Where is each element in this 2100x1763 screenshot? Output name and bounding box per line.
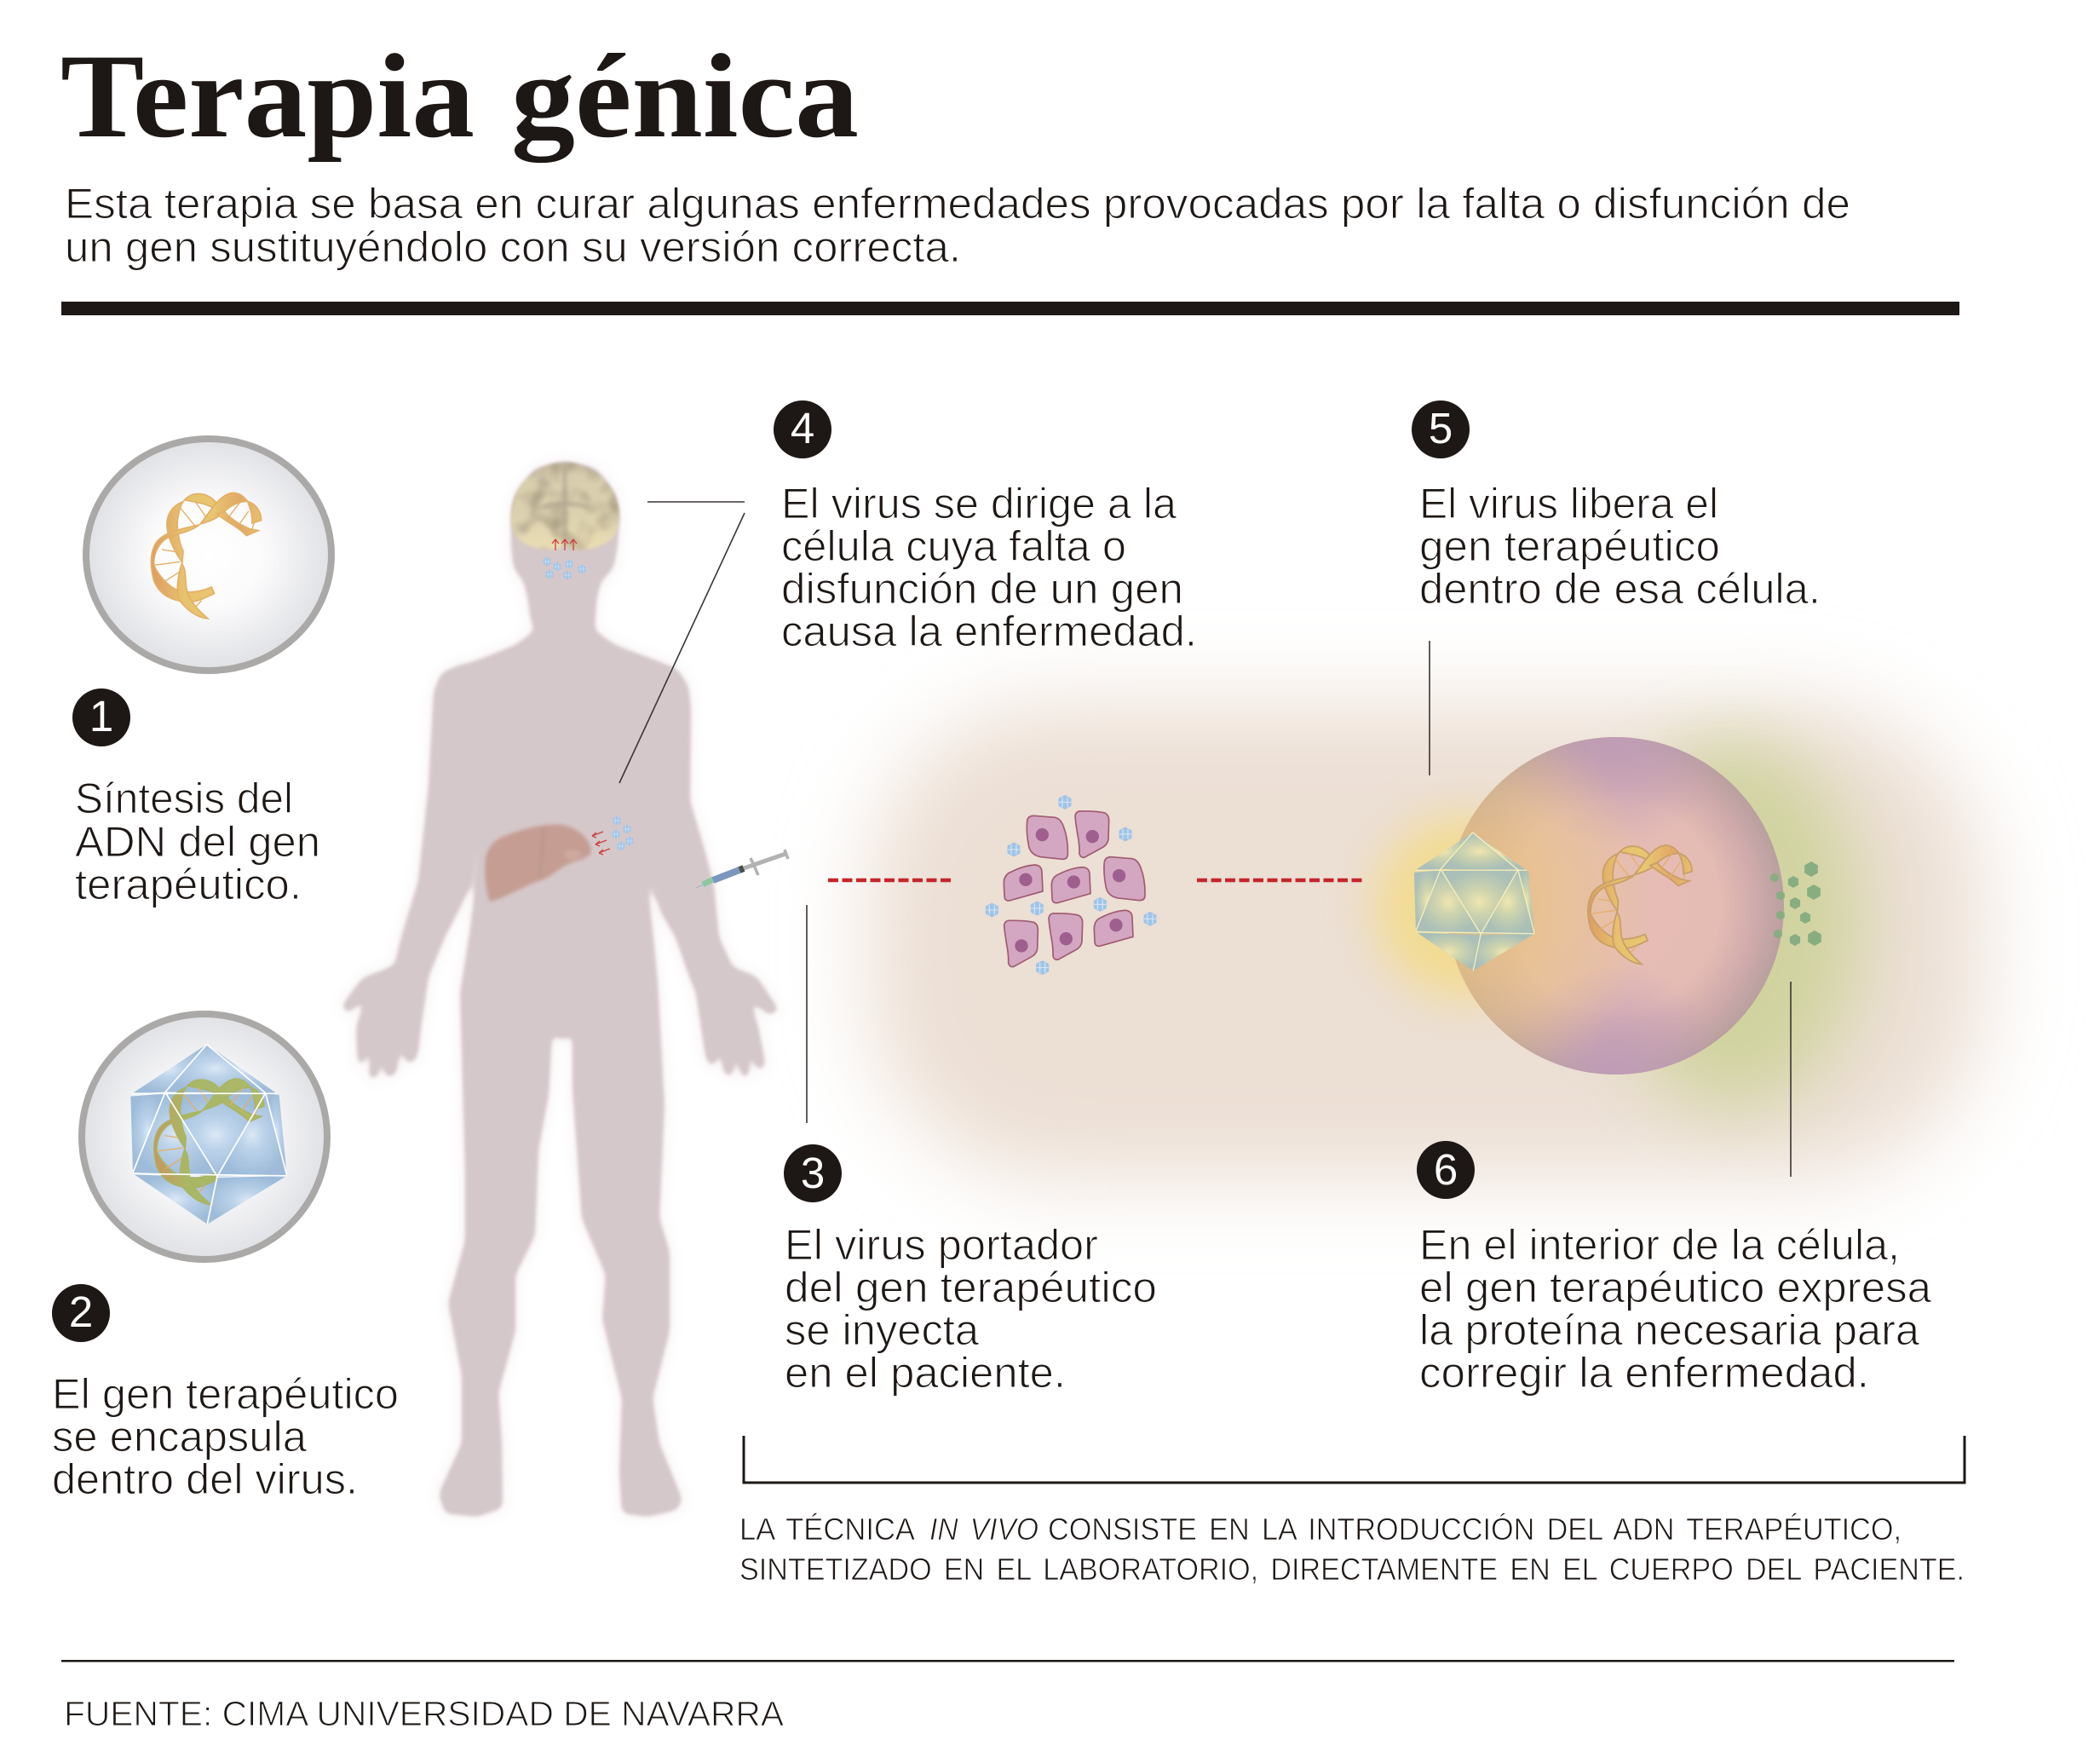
cell glow: yellow and green xyxy=(1375,741,1861,1108)
dashed arrow right xyxy=(1197,879,1362,882)
text 4 xyxy=(781,480,1197,655)
badge 3: 3 xyxy=(801,1149,825,1197)
text 6 xyxy=(1419,1221,1931,1397)
badge 2: 2 xyxy=(69,1288,93,1336)
step 6 xyxy=(1417,1141,1931,1397)
text 6: el gen terapéutico expresa xyxy=(1419,1264,1931,1311)
text 4: El virus se dirige a la xyxy=(781,480,1177,527)
text 5: dentro de esa célula. xyxy=(1419,565,1821,613)
icon: virus capsid with DNA xyxy=(130,1045,287,1224)
leader lines xyxy=(619,502,1791,1177)
badge 6 xyxy=(1417,1141,1475,1199)
step 5 xyxy=(1412,400,1821,613)
text 3: El virus portador xyxy=(785,1221,1098,1269)
panel: step 2 virus disc xyxy=(82,1014,327,1259)
text 4: disfunción de un gen xyxy=(781,565,1183,613)
human body figure xyxy=(341,461,780,1517)
text 3: en el paciente. xyxy=(785,1349,1066,1397)
text 3: se inyecta xyxy=(785,1306,979,1354)
badge 1: 1 xyxy=(89,692,113,740)
text 5: gen terapéutico xyxy=(1419,522,1720,570)
text 2: se encapsula xyxy=(52,1413,307,1461)
step 4 xyxy=(774,400,1197,655)
brain xyxy=(511,463,619,550)
panel: step 1 DNA disc xyxy=(86,439,331,671)
text 3 xyxy=(785,1221,1157,1397)
text 3: del gen terapéutico xyxy=(785,1264,1157,1311)
footnote: in vivo technique xyxy=(739,1512,1965,1587)
target cell xyxy=(1447,737,1784,1075)
text 1: terapéutico. xyxy=(75,861,302,908)
title: génica xyxy=(511,30,859,163)
footnote: in vivo technique: LA TÉCNICA xyxy=(739,1512,915,1547)
footnote: in vivo technique: IN VIVO xyxy=(929,1512,1038,1547)
bracket xyxy=(744,1436,1965,1483)
icon: syringe xyxy=(696,850,788,888)
badge 2 xyxy=(52,1284,110,1342)
liver xyxy=(485,825,591,902)
proteins xyxy=(1770,861,1821,946)
icon: virus capsid at cell xyxy=(1414,833,1534,971)
badge 6: 6 xyxy=(1434,1145,1458,1194)
cell cluster xyxy=(986,795,1156,975)
footnote: in vivo technique: SINTETIZADO EN EL LABORATORIO, DIRECTAMENTE EN EL CUERPO DEL PACIENTE. xyxy=(739,1552,1965,1587)
viruses near brain xyxy=(544,557,586,579)
text 2 xyxy=(52,1370,399,1503)
text 6: la proteína necesaria para xyxy=(1419,1306,1919,1354)
badge 5: 5 xyxy=(1429,404,1453,452)
intro text xyxy=(65,180,1850,271)
text 6: corregir la enfermedad. xyxy=(1419,1349,1869,1397)
source: FUENTE: CIMA UNIVERSIDAD DE NAVARRA xyxy=(64,1694,785,1733)
step 1 xyxy=(72,688,320,908)
intro text: un gen sustituyéndolo con su versión correcta. xyxy=(65,223,961,271)
badge 1 xyxy=(72,688,130,746)
text 5 xyxy=(1419,480,1821,613)
icon: DNA released in cell xyxy=(1588,845,1692,965)
text 6: En el interior de la célula, xyxy=(1419,1221,1900,1269)
title: Terapia xyxy=(60,30,475,163)
text 1: ADN del gen xyxy=(75,818,320,866)
icon: DNA helix xyxy=(151,493,262,619)
arrows: to brain xyxy=(552,539,577,550)
text 4: célula cuya falta o xyxy=(781,522,1126,570)
dashed arrow left xyxy=(828,879,952,882)
title xyxy=(60,30,859,163)
background glow xyxy=(869,703,1985,1180)
badge 4 xyxy=(774,400,831,458)
text 1 xyxy=(75,775,320,908)
text 2: dentro del virus. xyxy=(52,1455,358,1503)
badge 5 xyxy=(1412,400,1470,458)
step 3 xyxy=(784,1144,1157,1397)
intro text: Esta terapia se basa en curar algunas enfermedades provocadas por la falta o disfunción de xyxy=(65,180,1850,228)
text 1: Síntesis del xyxy=(75,775,293,822)
viruses near liver xyxy=(612,816,634,850)
arrows: to liver xyxy=(592,832,610,855)
badge 3 xyxy=(784,1144,842,1202)
step 2 xyxy=(52,1284,399,1503)
badge 4: 4 xyxy=(791,404,814,452)
footnote: in vivo technique: CONSISTE EN LA INTRODUCCIÓN DEL ADN TERAPÉUTICO, xyxy=(1048,1512,1902,1547)
text 4: causa la enfermedad. xyxy=(781,608,1197,655)
text 2: El gen terapéutico xyxy=(52,1370,399,1418)
text 5: El virus libera el xyxy=(1419,480,1718,527)
